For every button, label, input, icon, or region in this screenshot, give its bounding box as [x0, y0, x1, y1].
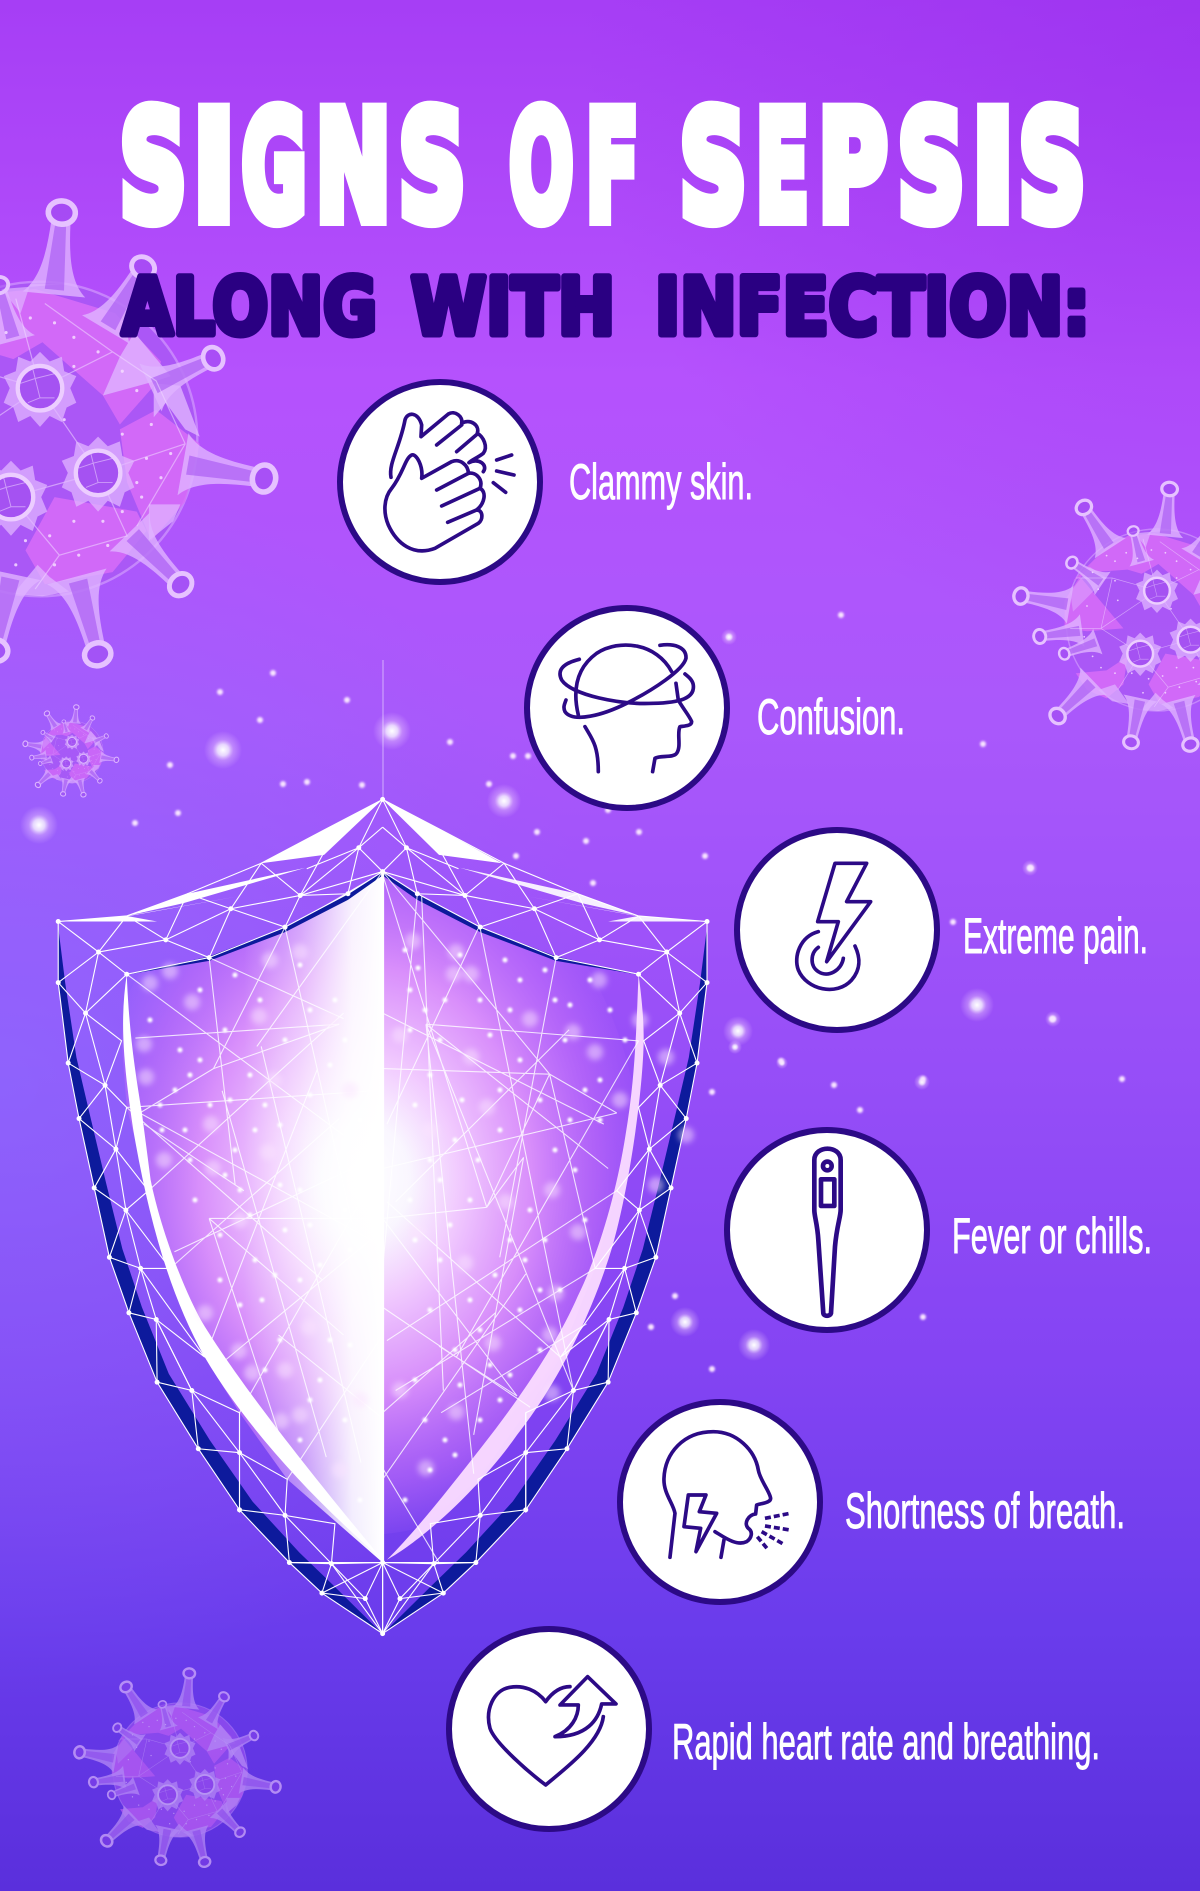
shield: particles large: [144, 941, 686, 1470]
shield: centre line: [381, 872, 384, 1563]
virus: large top left: [0, 198, 281, 673]
item: rapid heart rate: [449, 1629, 1100, 1829]
icon: head exhaling: [620, 1402, 820, 1602]
subtitle: INFECTION:: [655, 263, 1090, 353]
title: F: [586, 81, 639, 255]
subtitle: WITH: [411, 263, 615, 353]
shield: apex ray: [382, 660, 384, 800]
item: clammy skin: [340, 382, 753, 582]
title: N: [316, 81, 391, 255]
title: O: [509, 81, 573, 255]
shield: particles small: [150, 950, 625, 1500]
title: S: [399, 81, 466, 255]
title: I: [972, 81, 1014, 255]
item: confusion: [527, 608, 905, 808]
shield: white blades: [123, 974, 383, 1560]
virus: small left: [22, 704, 120, 798]
item: fever or chills: [727, 1130, 1152, 1330]
title: S: [120, 81, 187, 255]
icon: heart with arrow: [449, 1629, 649, 1829]
shield: top shards: [58, 799, 707, 922]
virus: bottom left: [72, 1667, 283, 1870]
icon: hands: [340, 382, 540, 582]
shield: wire mesh: [58, 799, 707, 1634]
shield: mesh star nodes: [58, 799, 707, 1634]
title: S: [898, 81, 965, 255]
virus: right: [1011, 481, 1200, 756]
icon: dizzy head: [527, 608, 727, 808]
title: S: [680, 81, 747, 255]
shield: left half sheen: [244, 872, 383, 1563]
title: G: [242, 81, 307, 255]
shield: glow core: [122, 876, 629, 1532]
title: S: [1019, 81, 1086, 255]
icon: lightning pain: [737, 830, 937, 1030]
title: I: [193, 81, 235, 255]
item: extreme pain: [737, 830, 1148, 1030]
title: E: [756, 81, 809, 255]
background sparkles: [20, 615, 1122, 1369]
item: shortness of breath: [620, 1402, 1125, 1602]
label: clammy skin: Clammy skin.: [569, 454, 753, 510]
icon: thermometer: [727, 1130, 927, 1330]
title: P: [818, 81, 887, 255]
subtitle: ALONG: [122, 263, 377, 353]
subtitle: [122, 263, 1090, 353]
label: confusion: Confusion.: [757, 689, 905, 745]
shield: [58, 660, 707, 1634]
shield: outer blue band: [58, 872, 707, 1632]
